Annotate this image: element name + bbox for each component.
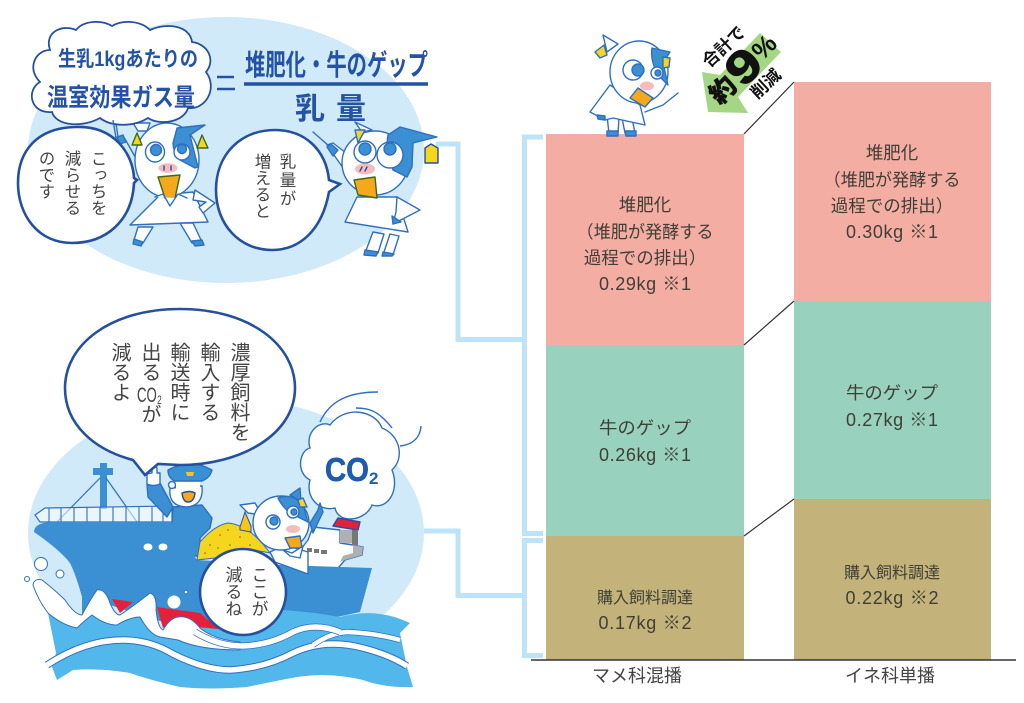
callout: speech bubble ここが減るね: 減るね [222, 566, 242, 617]
segment: 堆肥化 0.30kg: 過程での排出） [831, 196, 953, 216]
segment: 堆肥化 0.29kg: 過程での排出） [584, 248, 706, 268]
icon: portholes [144, 544, 168, 550]
icon: ship superstructure [285, 518, 363, 578]
segment: 堆肥化 0.30kg [794, 82, 991, 301]
segment: 堆肥化 0.29kg: 堆肥化 [619, 195, 671, 215]
column: イネ科単播 [794, 82, 991, 660]
segment: 牛のゲップ 0.27kg [794, 301, 991, 499]
callout: speech bubble ここが減るね: ここが [248, 566, 268, 617]
equation: fraction bar [244, 82, 428, 86]
icon: CO2 smoke cloud: CO [325, 451, 369, 488]
icon: CO2 smoke cloud [301, 392, 421, 519]
icon: cow left [115, 117, 215, 246]
segment: 堆肥化 0.30kg: 堆肥化 [866, 143, 918, 163]
callout: thought cloud title: 生乳1kgあたりの [58, 48, 198, 71]
icon: yellow sack [197, 512, 270, 560]
callout: speech bubble こっちを減らせるのです: こっちを [88, 150, 106, 216]
connector: lower illustration to bar bracket [424, 531, 543, 656]
icon: cow on top of the bar [590, 35, 678, 136]
callout: thought cloud title: 温室効果ガス量 [47, 84, 195, 112]
callout: speech bubble こっちを減らせるのです: のです [36, 150, 54, 200]
segment: 堆肥化 0.30kg: （堆肥が発酵する [824, 170, 960, 190]
arrow: 合計で約9%削減 [699, 23, 785, 113]
segment: 購入飼料調達 0.22kg: 0.22kg ※2 [846, 588, 938, 608]
arrow: 合計で約9%削減: 9 [715, 38, 773, 96]
callout: captain speech bubble: が [138, 404, 160, 424]
callout: captain speech bubble: 濃厚飼料を [227, 342, 250, 442]
callout: speech bubble 乳量が増えると: 乳量が [277, 153, 296, 208]
panel: formula and cows [18, 22, 438, 256]
icon: cow on the ship [240, 488, 323, 574]
column: マメ科混播 [546, 134, 744, 660]
equation: denominator 乳量: 乳量 [295, 93, 366, 126]
axis label: マメ科混播: マメ科混播 [592, 666, 682, 686]
chart: stacked bars [531, 82, 1016, 686]
arrow: 合計で約9%削減: 削減 [747, 65, 785, 103]
callout: thought cloud title [32, 22, 211, 150]
arrow: 合計で約9%削減: 約 [703, 70, 743, 110]
segment: 牛のゲップ 0.27kg: 0.27kg ※1 [846, 410, 938, 430]
callout: captain speech bubble: 輸入する [197, 342, 220, 422]
callout: speech bubble こっちを減らせるのです [18, 127, 137, 243]
equation: numerator 堆肥化・牛のゲップ: 堆肥化・牛のゲップ [245, 49, 428, 82]
callout: captain speech bubble: CO₂ [137, 384, 162, 407]
equation: equals sign [217, 77, 235, 89]
segment: 牛のゲップ 0.26kg: 0.26kg ※1 [599, 445, 691, 465]
callout: speech bubble 乳量が増えると: 増えると [252, 153, 271, 219]
callout: captain speech bubble: 輸送時に [167, 342, 190, 422]
arrow: 合計で約9%削減: 合計で [699, 23, 749, 71]
segment: 購入飼料調達 0.17kg: 購入飼料調達 [597, 589, 693, 607]
segment: 購入飼料調達 0.22kg: 購入飼料調達 [844, 564, 940, 582]
segment: 購入飼料調達 0.22kg [794, 499, 991, 660]
icon: cow right [313, 122, 438, 256]
segment: 購入飼料調達 0.17kg: 0.17kg ※2 [598, 613, 692, 633]
callout: captain speech bubble [65, 309, 295, 475]
segment: 牛のゲップ 0.27kg: 牛のゲップ [846, 383, 939, 403]
icon: foam bubbles [24, 558, 188, 608]
segment: 堆肥化 0.29kg [546, 134, 744, 345]
background: upper light blue ellipse [28, 17, 424, 283]
arrow: 合計で約9%削減: % [745, 28, 783, 66]
connector: upper illustration to bar bracket [436, 137, 543, 534]
callout: captain speech bubble: 減るよ [108, 342, 131, 402]
icon: sea waves [33, 580, 413, 688]
segment: 牛のゲップ 0.26kg: 牛のゲップ [599, 418, 692, 438]
background: lower light blue ellipse [28, 398, 424, 668]
axis label: イネ科単播: イネ科単播 [845, 666, 935, 686]
callout: captain speech bubble: 出る [138, 342, 160, 382]
callout: speech bubble ここが減るね [200, 549, 286, 635]
icon: captain [147, 464, 212, 556]
segment: 牛のゲップ 0.26kg [546, 345, 744, 536]
icon: red hull waterline [112, 599, 220, 634]
segment: 堆肥化 0.29kg: 0.29kg ※1 [599, 274, 691, 294]
icon: ship hull [34, 522, 372, 640]
panel: ship illustration [24, 309, 421, 688]
callout: speech bubble こっちを減らせるのです: 減らせる [62, 150, 81, 216]
segment: 堆肥化 0.29kg: （堆肥が発酵する [576, 222, 714, 242]
callout: speech bubble 乳量が増えると [216, 130, 340, 250]
segment: 堆肥化 0.30kg: 0.30kg ※1 [846, 222, 938, 242]
segment: 購入飼料調達 0.17kg [546, 536, 744, 660]
icon: CO2 smoke cloud: 2 [369, 469, 378, 488]
icon: ship mast and railing [35, 463, 172, 523]
